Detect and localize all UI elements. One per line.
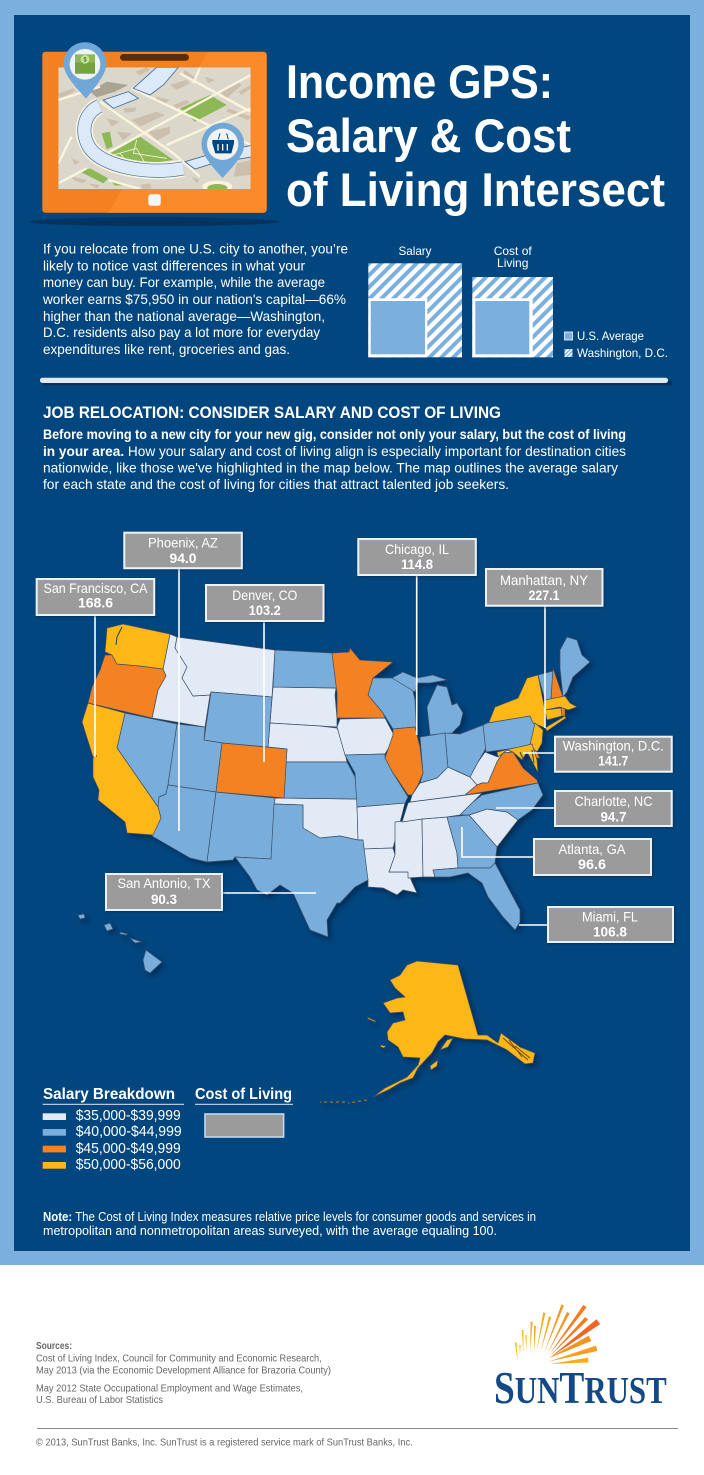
sources: Cost of Living Index, Council for Community and Economic Research, [36, 1353, 322, 1365]
chart legend: U.S. Average [577, 329, 644, 343]
callout: Phoenix, AZ [124, 533, 242, 831]
callout: San Antonio, TX: San Antonio, TX [118, 875, 211, 891]
callout: Miami, FL [519, 907, 673, 942]
chart label: Cost of Living: Living [497, 256, 528, 270]
sources: U.S. Bureau of Labor Statistics [36, 1394, 163, 1406]
callout: San Francisco, CA [37, 579, 154, 757]
callout: Chicago, IL: 114.8 [401, 556, 433, 572]
state: Alaska [320, 961, 535, 1103]
intro paragraph: likely to notice vast differences in what your [43, 258, 305, 274]
states: $40,000-$44,999 [117, 637, 590, 937]
icon: shopping basket map pin [201, 123, 244, 178]
states: $45,000-$49,999 [88, 648, 565, 798]
section paragraph: nationwide, like those we've highlighted in the map below. The map outlines the average salary [43, 460, 618, 476]
intro paragraph: expenditures like rent, groceries and gas. [43, 341, 290, 357]
legend: cost of living [195, 1086, 293, 1137]
intro paragraph: worker earns $75,950 in our nation's capital—66% [42, 291, 346, 307]
intro paragraph: If you relocate from one U.S. city to another, you’re [43, 240, 348, 256]
legend: salary breakdown: $50,000-$56,000 [76, 1157, 181, 1173]
legend: salary breakdown: Salary Breakdown [43, 1086, 175, 1103]
callout: Miami, FL: Miami, FL [582, 909, 638, 925]
callout: Denver, CO: 103.2 [249, 602, 281, 618]
chart legend: Washington, D.C. [577, 346, 668, 360]
callout: Phoenix, AZ: Phoenix, AZ [148, 535, 218, 551]
callout: Charlotte, NC [496, 791, 672, 826]
callout: Atlanta, GA [462, 827, 651, 875]
callout: Phoenix, AZ: 94.0 [170, 550, 197, 566]
logo sun rays [515, 1305, 600, 1364]
state: Hawaii islands [78, 914, 162, 973]
section paragraph: Before moving to a new city for your new gig, consider not only your salary, but the cost of living [43, 426, 626, 442]
callout: Miami, FL: 106.8 [593, 924, 627, 940]
callout: San Antonio, TX [106, 874, 316, 910]
callout: Washington, D.C.: 141.7 [598, 752, 628, 768]
tablet map screen [58, 42, 253, 193]
title [286, 55, 665, 216]
chart label: Salary: Salary [398, 244, 432, 258]
note: Note: The Cost of Living Index measures relative price levels for consumer goods and services in [43, 1210, 536, 1224]
sources: May 2012 State Occupational Employment and Wage Estimates, [36, 1383, 303, 1395]
callout: Chicago, IL [358, 539, 476, 735]
section paragraph: in your area. How your salary and cost of living align is especially important for destination cities [43, 443, 626, 459]
callout: Denver, CO: Denver, CO [232, 587, 297, 603]
states: $35,000-$39,999 [152, 634, 518, 895]
chart label: Cost of Living: Cost of [494, 244, 532, 258]
legend: cost of living: Cost of Living [195, 1086, 292, 1103]
logo wordmark: SUNTRUST [494, 1362, 667, 1413]
title: Salary & Cost [286, 109, 571, 162]
callout: San Francisco, CA: San Francisco, CA [44, 580, 148, 596]
section heading: JOB RELOCATION: CONSIDER SALARY AND COST OF LIVING [43, 403, 501, 422]
sources: May 2013 (via the Economic Development Alliance for Brazoria County) [36, 1364, 331, 1376]
sources: Sources: [36, 1340, 72, 1352]
callout: Charlotte, NC: 94.7 [600, 809, 627, 825]
callout: Denver, CO [206, 585, 324, 762]
icon: money map pin: $ [83, 58, 87, 64]
legend: salary breakdown [43, 1086, 184, 1173]
legend: salary breakdown: $35,000-$39,999 [76, 1108, 181, 1124]
title: Income GPS: [286, 55, 553, 108]
callout: San Francisco, CA: 168.6 [78, 595, 113, 611]
title: of Living Intersect [286, 163, 665, 216]
intro paragraph: higher than the national average—Washington, [43, 308, 325, 324]
note: metropolitan and nonmetropolitan areas surveyed, with the average equaling 100. [43, 1224, 497, 1238]
illustration: tablet with GPS map [29, 42, 279, 226]
callout: Manhattan, NY [486, 569, 602, 728]
chart legend [564, 329, 668, 360]
intro paragraph: money can buy. For example, while the average [43, 274, 325, 290]
cost of living square [472, 277, 553, 357]
callout: San Antonio, TX: 90.3 [151, 891, 177, 907]
callout: Chicago, IL: Chicago, IL [385, 541, 449, 557]
legend: salary breakdown: $40,000-$44,999 [76, 1124, 182, 1140]
note [43, 1210, 536, 1238]
section paragraph [43, 426, 626, 492]
callout: Atlanta, GA: 96.6 [578, 856, 606, 872]
callout: Manhattan, NY: 227.1 [528, 587, 560, 603]
section paragraph: for each state and the cost of living for cities that attract talented job seekers. [43, 476, 509, 492]
sources [36, 1340, 331, 1406]
icon: money map pin [64, 42, 106, 99]
legend: salary breakdown: $45,000-$49,999 [76, 1141, 181, 1157]
salary square [368, 263, 462, 357]
callout: Manhattan, NY: Manhattan, NY [500, 572, 589, 588]
bar chart: salary and cost of living comparison [368, 244, 668, 360]
callout: Charlotte, NC: Charlotte, NC [574, 793, 652, 809]
intro paragraph: D.C. residents also pay a lot more for everyday [43, 324, 320, 340]
intro paragraph [42, 240, 348, 357]
callout: Atlanta, GA: Atlanta, GA [558, 841, 626, 857]
callout: Washington, D.C.: Washington, D.C. [563, 738, 664, 754]
callout: Washington, D.C. [523, 737, 672, 772]
states: $50,000-$56,000 [82, 624, 577, 1103]
US map by salary band [78, 624, 590, 1103]
copyright: © 2013, SunTrust Banks, Inc. SunTrust is a registered service mark of SunTrust Banks, Inc. [36, 1437, 413, 1449]
logo: SunTrust [494, 1305, 667, 1413]
